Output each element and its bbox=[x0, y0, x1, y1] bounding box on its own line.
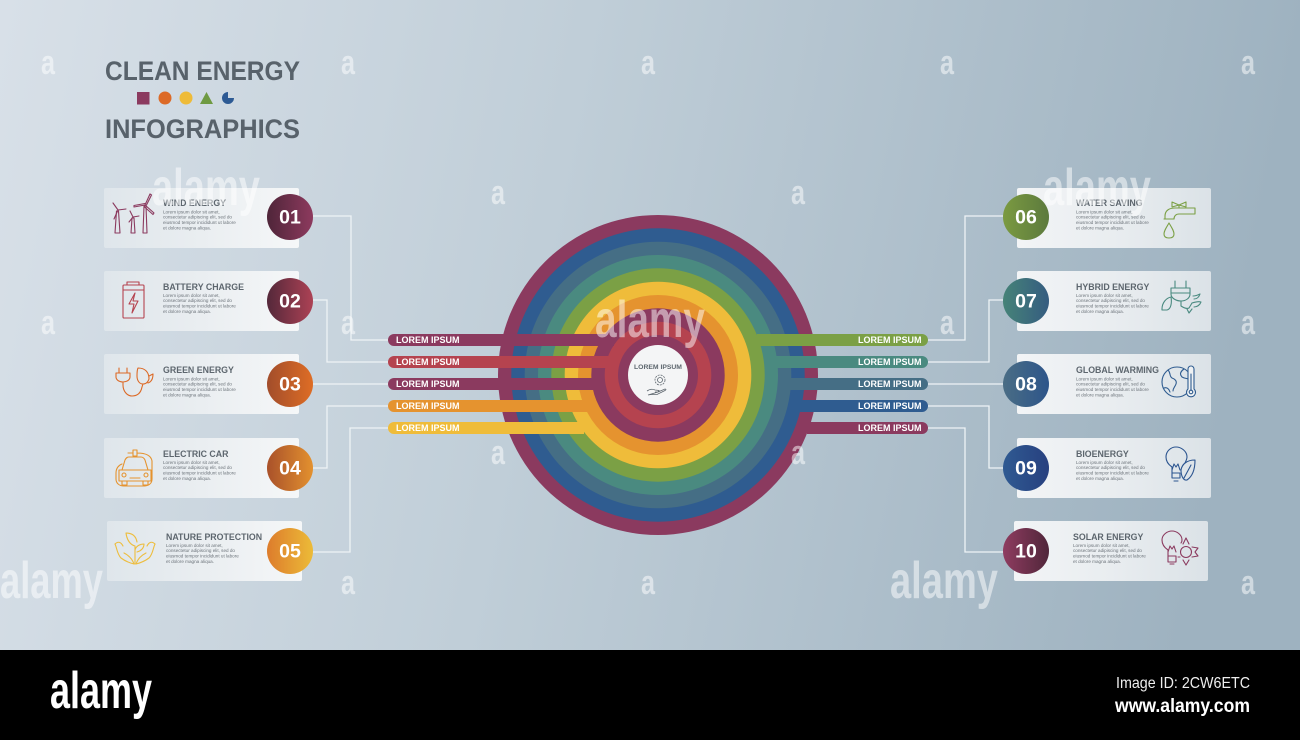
badge 08: 08 bbox=[1015, 374, 1037, 396]
card 01: wind energy: Lorem ipsum dolor sit amet, bbox=[163, 210, 220, 214]
watermarks: a bbox=[1241, 304, 1256, 342]
ribbon 3 bbox=[388, 378, 595, 390]
watermarks: a bbox=[791, 434, 806, 472]
card 09: bioenergy: consectetur adipiscing elit, sed do bbox=[1076, 465, 1145, 470]
image id: Image ID: 2CW6ETC bbox=[1116, 675, 1250, 692]
watermarks: a bbox=[1241, 44, 1256, 82]
title shapes bbox=[137, 92, 234, 104]
badge 03: 03 bbox=[279, 374, 301, 396]
card 07: hybrid energy: eiusmod tempor incididunt ut labore bbox=[1076, 304, 1149, 308]
badge 03 bbox=[267, 361, 313, 407]
badge 05: 05 bbox=[279, 540, 301, 562]
watermarks: a bbox=[641, 44, 656, 82]
card 02: battery charge: BATTERY CHARGE bbox=[163, 282, 244, 292]
logo: alamy bbox=[50, 662, 152, 720]
ribbon 8: LOREM IPSUM bbox=[858, 379, 922, 389]
icon: plug with leaves bbox=[1162, 281, 1201, 313]
icon: water tap bbox=[1164, 202, 1195, 238]
watermarks: a bbox=[940, 304, 955, 342]
card 10: solar energy bbox=[1003, 521, 1208, 581]
watermarks: alamy bbox=[890, 552, 998, 610]
card 03: green energy: GREEN ENERGY bbox=[163, 365, 234, 375]
card 08: global warming bbox=[1003, 354, 1211, 414]
ribbon 6: LOREM IPSUM bbox=[858, 335, 922, 345]
card 06: water saving: eiusmod tempor incididunt ut labore bbox=[1076, 220, 1149, 225]
badge 01: 01 bbox=[279, 206, 301, 228]
card 02: battery charge bbox=[104, 271, 313, 331]
watermarks: alamy bbox=[1043, 159, 1151, 217]
card 10: solar energy: eiusmod tempor incididunt ut labore bbox=[1073, 554, 1146, 558]
card 10: solar energy: consectetur adipiscing elit, sed do bbox=[1073, 548, 1142, 553]
card 05: nature protection bbox=[107, 521, 313, 581]
card 06: water saving: WATER SAVING bbox=[1076, 198, 1143, 208]
ribbon 1 bbox=[388, 334, 614, 346]
card 01: wind energy: consectetur adipiscing elit, sed do bbox=[163, 214, 232, 220]
watermarks: a bbox=[341, 564, 356, 602]
watermarks: alamy bbox=[0, 552, 103, 610]
badge 08 bbox=[1003, 361, 1049, 407]
card 08: global warming: Lorem ipsum dolor sit amet, bbox=[1076, 376, 1133, 382]
card 03: green energy: Lorem ipsum dolor sit amet, bbox=[163, 376, 220, 382]
ribbon 8 bbox=[790, 378, 928, 390]
badge 10 bbox=[1003, 528, 1049, 574]
badge 02: 02 bbox=[279, 290, 301, 312]
left ribbons bbox=[388, 334, 614, 434]
card 10: solar energy: et dolore magna aliqua. bbox=[1073, 559, 1121, 564]
card 01: wind energy: eiusmod tempor incididunt ut labore bbox=[163, 220, 236, 225]
card 10: solar energy: SOLAR ENERGY bbox=[1073, 532, 1144, 542]
connector lines bbox=[313, 216, 1003, 552]
watermarks bbox=[0, 44, 1256, 610]
card 08: global warming: GLOBAL WARMING bbox=[1076, 365, 1159, 375]
card 02: battery charge: et dolore magna aliqua. bbox=[163, 309, 211, 314]
badge 04 bbox=[267, 445, 313, 491]
card 07: hybrid energy: et dolore magna aliqua. bbox=[1076, 309, 1124, 314]
card 04: electric car bbox=[104, 438, 313, 498]
card 09: bioenergy: BIOENERGY bbox=[1076, 449, 1129, 459]
badge 02 bbox=[267, 278, 313, 324]
watermarks: a bbox=[41, 304, 56, 342]
website: www.alamy.com bbox=[1114, 696, 1250, 717]
card 01: wind energy: et dolore magna aliqua. bbox=[163, 226, 211, 230]
card 05: nature protection: consectetur adipiscing elit, sed do bbox=[166, 548, 235, 553]
title: CLEAN ENERGY bbox=[105, 56, 300, 86]
icon: globe and thermometer bbox=[1162, 366, 1196, 397]
ribbon 5: LOREM IPSUM bbox=[396, 423, 460, 433]
card 02: battery charge: consectetur adipiscing elit, sed do bbox=[163, 298, 232, 303]
badge 10: 10 bbox=[1015, 540, 1037, 562]
card 04: electric car: consectetur adipiscing elit, sed do bbox=[163, 465, 232, 470]
badge 09: 09 bbox=[1015, 458, 1037, 480]
badge 06 bbox=[1003, 194, 1049, 240]
card 09: bioenergy: Lorem ipsum dolor sit amet, bbox=[1076, 460, 1133, 465]
badge 05 bbox=[267, 528, 313, 574]
card 09: bioenergy bbox=[1003, 438, 1211, 498]
card 04: electric car: eiusmod tempor incididunt ut labore bbox=[163, 470, 236, 476]
card 07: hybrid energy: Lorem ipsum dolor sit amet, bbox=[1076, 293, 1133, 298]
ribbon 1: LOREM IPSUM bbox=[396, 335, 460, 345]
badge 04: 04 bbox=[279, 458, 301, 480]
watermarks: a bbox=[791, 174, 806, 212]
card 08: global warming: eiusmod tempor incididunt ut labore bbox=[1076, 387, 1149, 392]
center hub: LOREM IPSUM bbox=[634, 364, 682, 371]
watermarks: a bbox=[341, 44, 356, 82]
badge 07: 07 bbox=[1015, 290, 1037, 312]
icon: plug with leaf bbox=[116, 368, 153, 396]
card 03: green energy bbox=[104, 354, 313, 414]
card 05: nature protection: Lorem ipsum dolor sit amet, bbox=[166, 543, 223, 548]
watermarks: alamy bbox=[595, 291, 705, 349]
icon: bulb and leaf bbox=[1166, 447, 1195, 481]
ribbon 10: LOREM IPSUM bbox=[858, 423, 922, 433]
card 02: battery charge: eiusmod tempor incididunt ut labore bbox=[163, 304, 236, 308]
card 07: hybrid energy: HYBRID ENERGY bbox=[1076, 282, 1149, 292]
card 07: hybrid energy: consectetur adipiscing elit, sed do bbox=[1076, 298, 1145, 303]
watermarks: a bbox=[1241, 564, 1256, 602]
title bbox=[105, 56, 300, 144]
icon: wind turbines bbox=[113, 194, 154, 233]
ribbon 4 bbox=[388, 400, 588, 412]
icon: battery bbox=[123, 282, 144, 318]
card 08: global warming: et dolore magna aliqua. bbox=[1076, 392, 1124, 398]
card 05: nature protection: NATURE PROTECTION bbox=[166, 532, 262, 542]
ribbon 4: LOREM IPSUM bbox=[396, 401, 460, 411]
ribbon 3: LOREM IPSUM bbox=[396, 379, 460, 389]
card 10: solar energy: Lorem ipsum dolor sit amet, bbox=[1073, 543, 1130, 548]
watermarks: alamy bbox=[152, 159, 260, 217]
badge 01 bbox=[267, 194, 313, 240]
watermarks: a bbox=[940, 44, 955, 82]
center hub bbox=[628, 345, 688, 405]
card 03: green energy: et dolore magna aliqua. bbox=[163, 392, 211, 398]
ribbon 5 bbox=[388, 422, 584, 434]
concentric rainbow rings bbox=[498, 215, 818, 535]
ribbon 2 bbox=[388, 356, 609, 368]
badge 06: 06 bbox=[1015, 206, 1037, 228]
badge 09 bbox=[1003, 445, 1049, 491]
card 09: bioenergy: et dolore magna aliqua. bbox=[1076, 476, 1124, 481]
right ribbons bbox=[757, 334, 928, 434]
card 03: green energy: consectetur adipiscing elit, sed do bbox=[163, 382, 232, 386]
ribbon 7 bbox=[775, 356, 928, 368]
card 09: bioenergy: eiusmod tempor incididunt ut labore bbox=[1076, 470, 1149, 476]
card 04: electric car: et dolore magna aliqua. bbox=[163, 476, 211, 481]
card 06: water saving bbox=[1003, 188, 1211, 248]
title: INFOGRAPHICS bbox=[105, 114, 300, 144]
ribbon 2: LOREM IPSUM bbox=[396, 357, 460, 367]
ribbon 10 bbox=[807, 422, 928, 434]
card 05: nature protection: eiusmod tempor incididunt ut labore bbox=[166, 554, 239, 558]
card 05: nature protection: et dolore magna aliqua. bbox=[166, 559, 214, 564]
card 04: electric car: ELECTRIC CAR bbox=[163, 449, 229, 459]
card 02: battery charge: Lorem ipsum dolor sit amet, bbox=[163, 293, 220, 298]
card 07: hybrid energy bbox=[1003, 271, 1211, 331]
watermarks: a bbox=[491, 434, 506, 472]
card 08: global warming: consectetur adipiscing elit, sed do bbox=[1076, 382, 1145, 386]
badge 07 bbox=[1003, 278, 1049, 324]
ribbon 7: LOREM IPSUM bbox=[858, 357, 922, 367]
watermarks: a bbox=[641, 564, 656, 602]
card 01: wind energy bbox=[104, 188, 313, 248]
ribbon 6 bbox=[757, 334, 928, 346]
card 06: water saving: et dolore magna aliqua. bbox=[1076, 226, 1124, 230]
ribbon 9 bbox=[800, 400, 928, 412]
card 03: green energy: eiusmod tempor incididunt ut labore bbox=[163, 387, 236, 392]
watermarks: a bbox=[341, 304, 356, 342]
watermarks: a bbox=[491, 174, 506, 212]
ribbon 9: LOREM IPSUM bbox=[858, 401, 922, 411]
bottom black bar bbox=[0, 650, 1300, 740]
watermarks: a bbox=[41, 44, 56, 82]
icon: bulb and sun bbox=[1162, 531, 1198, 565]
card 01: wind energy: WIND ENERGY bbox=[163, 198, 226, 208]
card 04: electric car: Lorem ipsum dolor sit amet, bbox=[163, 460, 220, 465]
icon: electric car bbox=[116, 450, 152, 486]
card 06: water saving: consectetur adipiscing elit, sed do bbox=[1076, 214, 1145, 220]
icon: gear in hand bbox=[647, 375, 666, 395]
icon: hands with plant bbox=[115, 533, 155, 564]
card 06: water saving: Lorem ipsum dolor sit amet, bbox=[1076, 210, 1133, 214]
